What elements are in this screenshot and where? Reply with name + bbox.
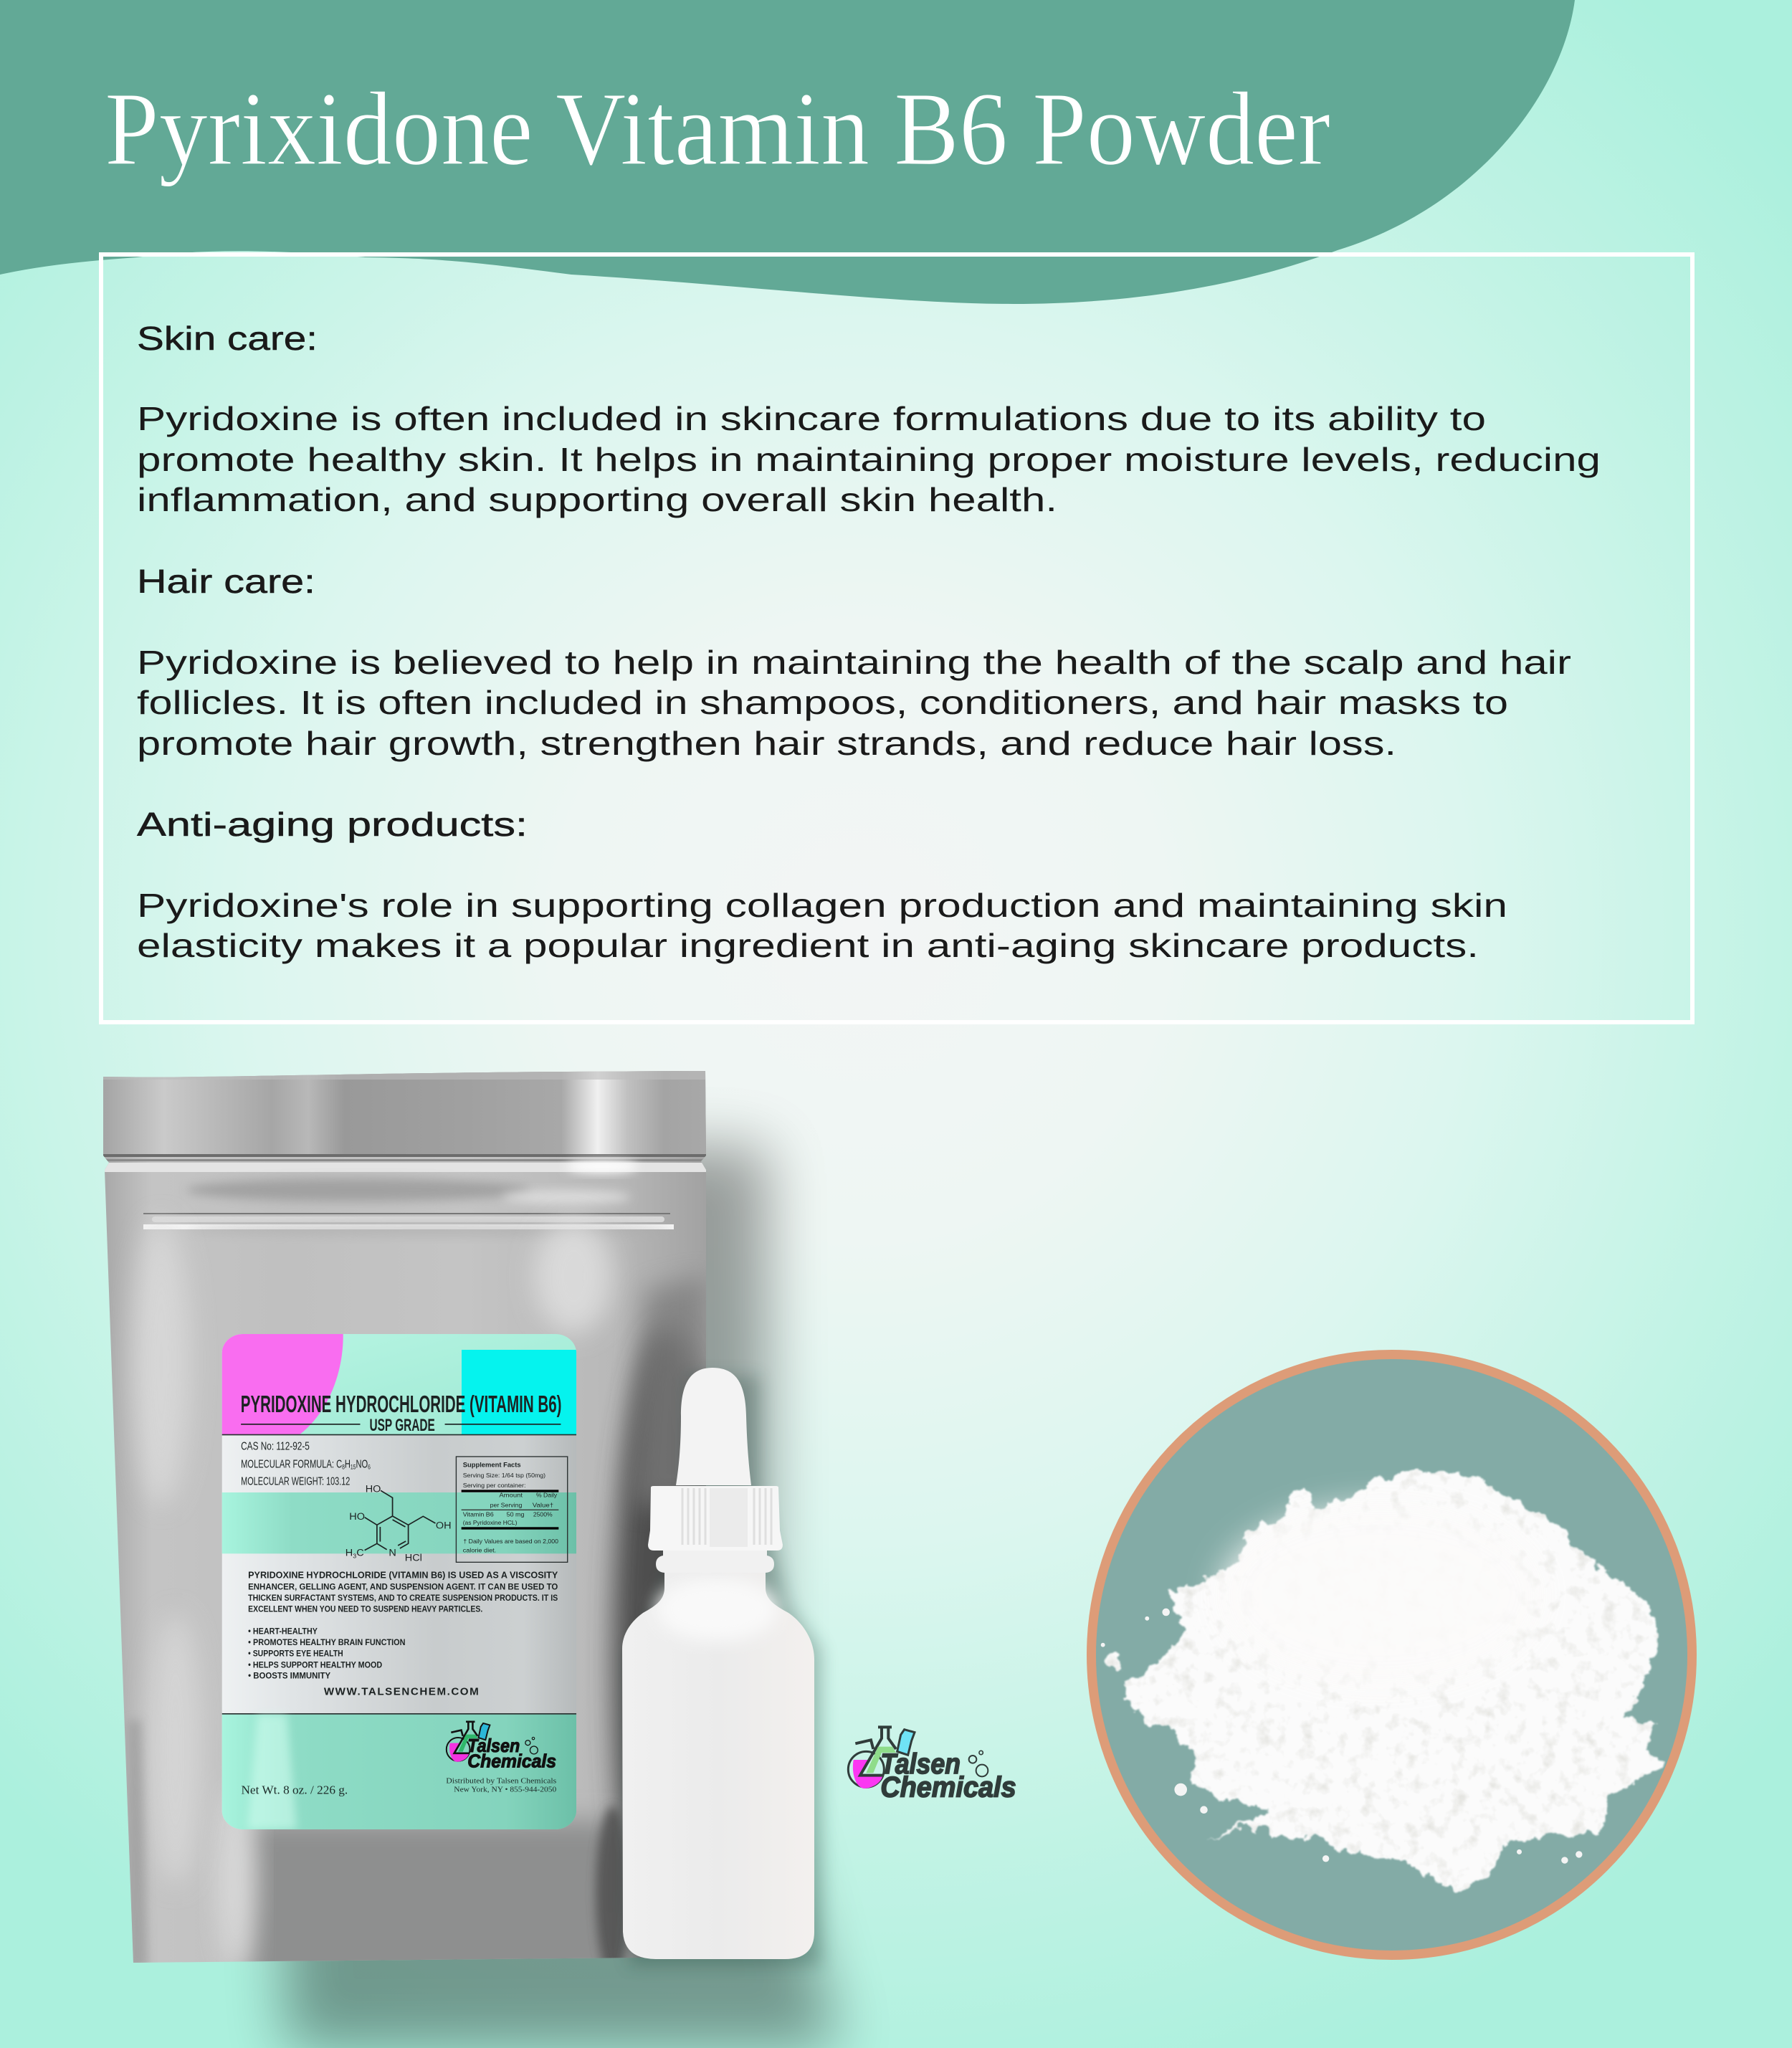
distributor: New York, NY • 855-944-2050 — [454, 1786, 556, 1794]
standalone Talsen Chemicals logo — [848, 1727, 1016, 1804]
label description: THICKEN SURFACTANT SYSTEMS, AND TO CREATE SUSPENSION PRODUCTS. IT IS — [248, 1593, 558, 1603]
pink shape — [222, 1334, 343, 1435]
heading: skin care: Skin care: — [137, 320, 318, 357]
product label — [222, 1334, 576, 1829]
standalone Talsen Chemicals logo: Talsen — [880, 1748, 961, 1780]
paragraph: skin care: promote healthy skin. It helps in maintaining proper moisture levels, reducing — [137, 441, 1601, 478]
label logo: Talsen — [467, 1735, 520, 1756]
supplement facts box: (as Pyridoxine HCL) — [463, 1519, 518, 1526]
grade line: USP GRADE — [370, 1416, 435, 1435]
benefit bullets: • HEART-HEALTHY — [248, 1627, 318, 1636]
benefit bullets: • BOOSTS IMMUNITY — [248, 1671, 330, 1681]
supplement facts box: % Daily — [536, 1492, 558, 1499]
header wave shape — [0, 0, 1575, 304]
paragraph: skin care: Pyridoxine is often included in skincare formulations due to its ability to — [137, 400, 1486, 437]
supplement facts box: Supplement Facts — [463, 1462, 521, 1469]
title: Pyrixidone Vitamin B6 Powder — [105, 70, 1330, 187]
distributor — [446, 1777, 556, 1794]
molecule diagram: HO — [366, 1484, 381, 1495]
benefit bullets — [248, 1627, 405, 1681]
heading: anti-aging products: Anti-aging products: — [137, 806, 528, 843]
molecule diagram: C — [356, 1548, 364, 1559]
lower teal block — [222, 1715, 576, 1829]
distributor: Distributed by Talsen Chemicals — [446, 1777, 556, 1785]
panel text — [137, 320, 1601, 964]
molecule diagram: HCl — [405, 1553, 422, 1563]
paragraph: anti-aging products — [137, 887, 1507, 964]
text panel frame — [101, 254, 1692, 1022]
chemical data: 6 — [368, 1464, 371, 1472]
supplement facts box — [456, 1457, 568, 1562]
heading: hair care: Hair care: — [137, 563, 315, 600]
supplement facts box: calorie diet. — [463, 1547, 496, 1554]
website: WWW.TALSENCHEM.COM — [324, 1687, 479, 1697]
supplement facts box: Serving Size: 1/64 tsp (50mg) — [463, 1472, 545, 1479]
paragraph: hair care: Pyridoxine is believed to help in maintaining the health of the scalp and hair — [137, 644, 1571, 681]
molecule diagram: OH — [436, 1520, 452, 1532]
molecule diagram: 3 — [353, 1552, 356, 1559]
chemical data: H — [345, 1459, 351, 1470]
label description: ENHANCER, GELLING AGENT, AND SUSPENSION AGENT. IT CAN BE USED TO — [248, 1582, 558, 1591]
chemical data — [241, 1441, 371, 1487]
label description — [248, 1570, 558, 1614]
molecule diagram: HO — [349, 1511, 365, 1523]
supplement facts box: 2500% — [533, 1511, 553, 1518]
benefit bullets: • SUPPORTS EYE HEALTH — [248, 1649, 343, 1659]
supplement facts box: Vitamin B6 — [463, 1511, 494, 1518]
molecule diagram: N — [389, 1548, 396, 1559]
cyan block — [462, 1350, 576, 1435]
foil pouch — [103, 1071, 720, 2000]
label background — [222, 1435, 564, 1829]
benefit bullets: • HELPS SUPPORT HEALTHY MOOD — [248, 1660, 382, 1670]
chemical data: NO — [356, 1459, 368, 1470]
label title: PYRIDOXINE HYDROCHLORIDE (VITAMIN B6) — [241, 1391, 561, 1418]
paragraph: anti-aging products: elasticity makes it a popular ingredient in anti-aging skincare products. — [137, 927, 1479, 964]
chemical data: CAS No: 112-92-5 — [241, 1441, 310, 1453]
label description: PYRIDOXINE HYDROCHLORIDE (VITAMIN B6) IS USED AS A VISCOSITY — [248, 1570, 558, 1581]
teal band — [222, 1492, 576, 1553]
label logo: Chemicals — [467, 1750, 556, 1771]
molecule diagram — [345, 1484, 452, 1563]
paragraph: skin care: inflammation, and supporting overall skin health. — [137, 481, 1057, 518]
paragraph: skin care — [137, 400, 1601, 518]
label logo — [447, 1722, 556, 1771]
paragraph: hair care — [137, 644, 1571, 762]
benefit bullets: • PROMOTES HEALTHY BRAIN FUNCTION — [248, 1637, 405, 1647]
chemical data: MOLECULAR WEIGHT: 103.12 — [241, 1476, 350, 1487]
standalone Talsen Chemicals logo: Chemicals — [880, 1772, 1016, 1804]
powder photo circle — [1091, 1355, 1692, 1956]
chemical data: 8 — [342, 1464, 345, 1472]
chemical data: MOLECULAR FORMULA: C — [241, 1459, 385, 1470]
paragraph: anti-aging products: Pyridoxine's role in supporting collagen production and maintaining skin — [137, 887, 1507, 924]
supplement facts box: 50 mg — [507, 1511, 525, 1518]
supplement facts box: † Daily Values are based on 2,000 — [463, 1538, 558, 1545]
supplement facts box: Amount — [499, 1492, 523, 1499]
supplement facts box: per Serving — [490, 1502, 523, 1509]
chemical data: 15 — [351, 1464, 356, 1472]
label description: EXCELLENT WHEN YOU NEED TO SUSPEND HEAVY PARTICLES. — [248, 1604, 482, 1614]
product shadow — [258, 1147, 839, 2048]
supplement facts box: Value† — [533, 1502, 553, 1509]
smooth top of pile — [1221, 1507, 1540, 1684]
molecule diagram: H — [345, 1548, 353, 1559]
paragraph: hair care: follicles. It is often included in shampoos, conditioners, and hair masks to — [137, 684, 1508, 721]
net weight: Net Wt. 8 oz. / 226 g. — [241, 1783, 348, 1797]
supplement facts box: Serving per container: — [463, 1482, 526, 1489]
dropper bottle — [622, 1368, 821, 1966]
paragraph: hair care: promote hair growth, strengthen hair strands, and reduce hair loss. — [137, 725, 1396, 762]
powder pile — [1101, 1471, 1664, 1894]
